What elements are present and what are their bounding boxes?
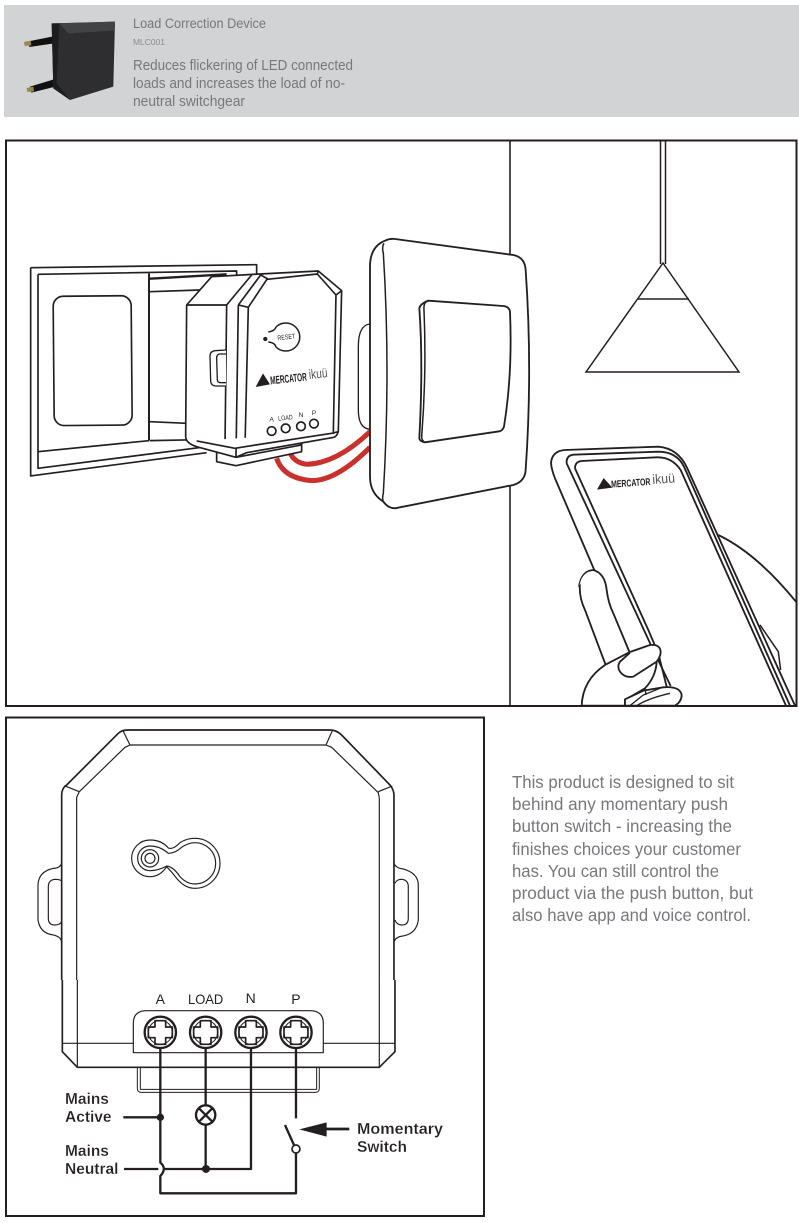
product description: loads and increases the load of no-	[133, 76, 345, 92]
label: momentary switch: Momentary	[357, 1121, 443, 1138]
product code: MLC001	[133, 37, 165, 47]
terminal labels: P	[291, 991, 301, 1007]
text block: product description: This product is designed to sit	[512, 772, 734, 792]
switch terminal	[292, 1145, 300, 1153]
logo: Mercator ikuu on module	[256, 365, 328, 387]
circuit wires	[123, 1048, 296, 1193]
label: momentary switch: Switch	[357, 1139, 407, 1156]
terminal labels: N	[246, 990, 256, 1006]
mounting tabs	[38, 863, 418, 942]
illustration: hand holding phone	[551, 447, 796, 706]
arrow: to momentary switch	[299, 1122, 349, 1137]
reset button: RESET	[277, 333, 296, 342]
wall box	[31, 265, 257, 476]
module lower edge	[62, 980, 395, 1092]
label: mains active: Mains	[65, 1091, 109, 1108]
panel: product header	[4, 5, 799, 117]
logo: Mercator ikuu on phone: ikuü	[652, 470, 675, 487]
logo: Mercator ikuu on module: MERCATOR	[270, 372, 307, 387]
keyhole mount	[132, 838, 220, 888]
module outline top	[38, 730, 418, 980]
label: mains neutral: Mains	[65, 1143, 109, 1160]
text block: product description: button switch - increasing the	[512, 816, 732, 836]
logo: Mercator ikuu on phone	[597, 470, 675, 491]
terminal labels: LOAD	[188, 991, 223, 1007]
product description: Reduces flickering of LED connected	[133, 58, 353, 74]
terminal labels and ports: LOAD	[278, 414, 293, 423]
text block: product description: also have app and voice control.	[512, 905, 751, 925]
reset button	[263, 323, 300, 351]
illustration: wall switch	[358, 239, 529, 508]
text block: product description: finishes choices your customer	[512, 839, 741, 859]
product description: neutral switchgear	[133, 94, 245, 110]
panel: installation illustration	[6, 140, 796, 706]
terminal labels and ports: P	[312, 410, 317, 417]
fingers and thumb	[579, 570, 682, 706]
logo: Mercator ikuu on phone: MERCATOR	[611, 477, 651, 491]
smart module body	[186, 271, 342, 466]
terminal labels and ports: N	[299, 412, 304, 419]
terminal labels and ports: A	[269, 416, 274, 423]
illustration: pendant lamp	[586, 140, 739, 372]
illustration: wall box and smart module	[31, 265, 370, 481]
text block: product description: product via the push button, but	[512, 883, 753, 903]
label: mains active: Active	[65, 1109, 112, 1126]
icon: load correction device photo	[24, 22, 115, 100]
product title: Load Correction Device	[133, 16, 266, 31]
terminal labels and ports	[267, 410, 318, 435]
terminal labels	[156, 990, 301, 1007]
terminal screws	[145, 1017, 312, 1048]
panel: wiring diagram	[6, 718, 484, 1216]
text block: product description: behind any momentary push	[512, 794, 728, 814]
logo: Mercator ikuu on module: ikuü	[308, 365, 328, 382]
wiring schematic	[62, 980, 395, 1193]
text block: product description: has. You can still control the	[512, 861, 719, 881]
icon: load lamp	[196, 1105, 215, 1125]
label: mains neutral: Neutral	[65, 1161, 118, 1178]
wires: red cables	[277, 432, 370, 481]
terminal labels: A	[156, 991, 166, 1007]
